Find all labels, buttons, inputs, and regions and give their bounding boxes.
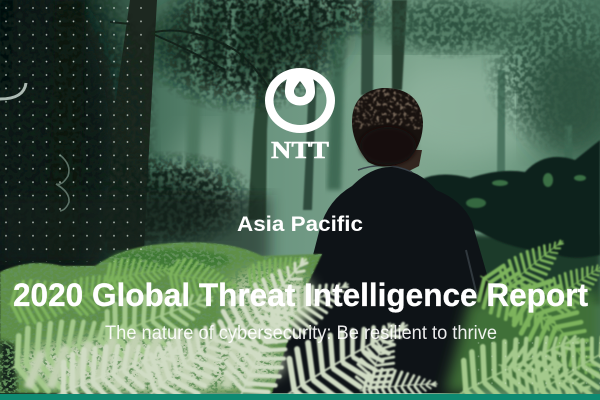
dot grid overlay xyxy=(0,0,145,262)
fern fine texture xyxy=(0,243,322,393)
tree trunks xyxy=(0,0,573,260)
hair shadow xyxy=(360,127,416,165)
logo wordmark: NTT xyxy=(271,138,329,164)
left lower shade xyxy=(0,195,270,265)
hair curls texture xyxy=(352,88,423,130)
black jacket xyxy=(264,167,502,393)
branches xyxy=(110,22,270,90)
fern base mass xyxy=(0,243,322,393)
lower right dot grid xyxy=(470,335,600,393)
main title: 2020 Global Threat Intelligence Report xyxy=(13,277,588,313)
man seen from behind xyxy=(264,88,502,393)
pale leaflets along bottom xyxy=(28,330,254,388)
ear and neck xyxy=(391,150,422,174)
NTT logo xyxy=(265,68,335,164)
decorative S curves xyxy=(56,155,69,211)
bottom teal strip xyxy=(0,394,600,400)
tree canopy foliage xyxy=(0,0,600,290)
logo mark xyxy=(265,68,335,133)
decorative arc xyxy=(0,83,26,99)
right side bushes xyxy=(420,140,600,305)
hair xyxy=(352,88,423,167)
foreground ferns xyxy=(0,226,600,400)
region label: Asia Pacific xyxy=(237,213,363,236)
subtitle: The nature of cybersecurity: Be resilient to thrive xyxy=(105,323,497,344)
